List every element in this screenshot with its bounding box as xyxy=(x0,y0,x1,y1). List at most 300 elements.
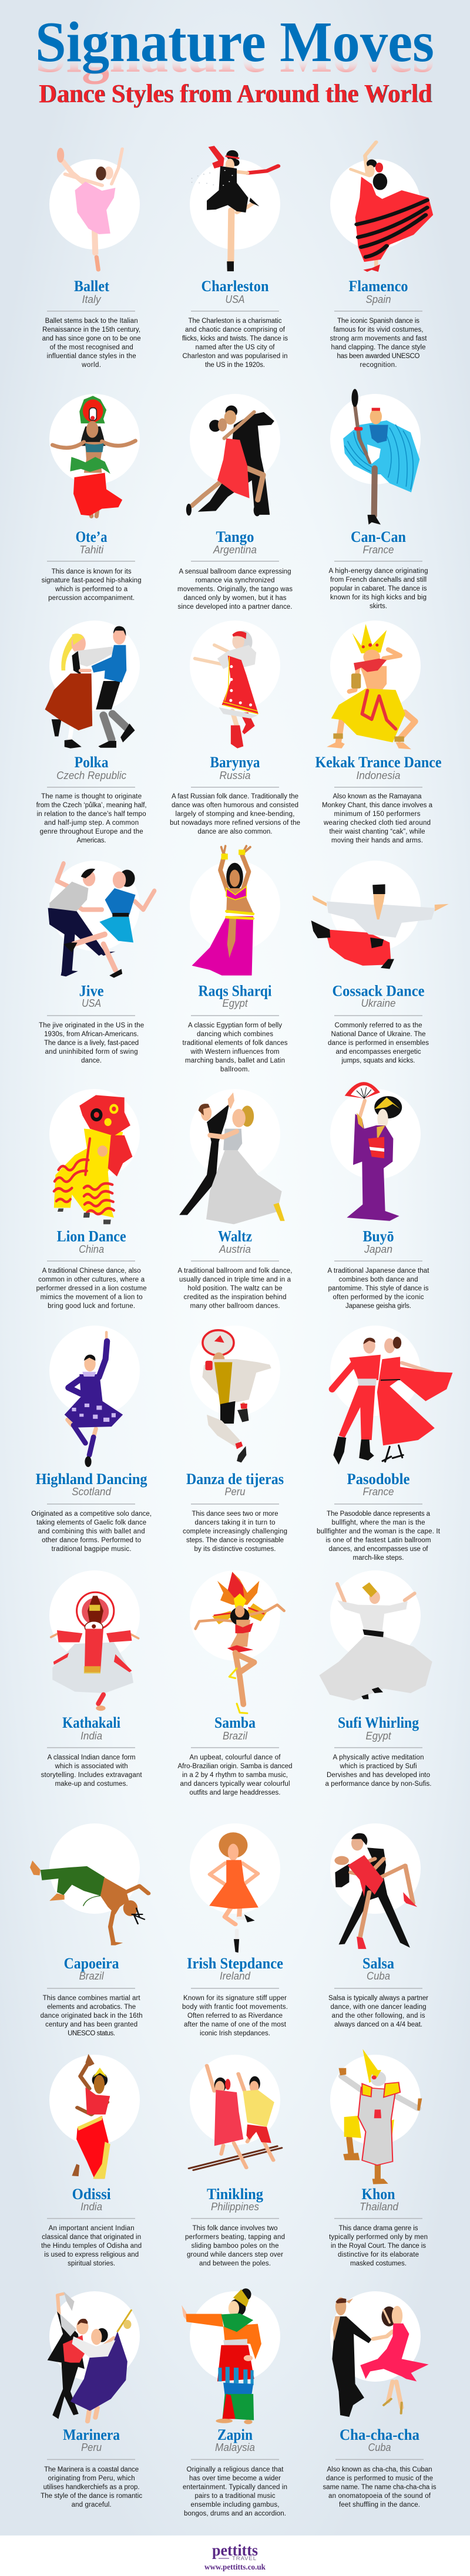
description: traditional bagpipe music. xyxy=(52,1546,132,1553)
heading: Kathakali xyxy=(62,1714,120,1731)
icon: irish stepdancer xyxy=(209,1832,258,1953)
country: Thailand xyxy=(360,2201,399,2213)
description: percussion accompaniment. xyxy=(48,595,135,602)
description: famous for its vivid costumes, xyxy=(334,326,423,333)
spotlight circle xyxy=(49,621,140,711)
description: utilises handkerchiefs as a prop. xyxy=(43,2484,140,2491)
description: Dervishes and has developed into xyxy=(327,1772,430,1779)
heading: Buyō xyxy=(363,1228,394,1245)
spotlight circle xyxy=(190,621,280,711)
description: Americas. xyxy=(77,837,106,844)
heading: Danza de tijeras xyxy=(186,1471,284,1488)
description: complete increasingly challenging xyxy=(183,1528,287,1535)
country: Scotland xyxy=(72,1486,112,1498)
country: Ukraine xyxy=(361,997,396,1009)
icon: capoeira dancer xyxy=(30,1860,149,1946)
description: The dance is a lively, fast-paced xyxy=(44,1040,139,1047)
description: bullfighter and the woman is the cape. It xyxy=(317,1528,441,1535)
description: dance. xyxy=(81,1057,102,1064)
description: The style of the dance is romantic xyxy=(41,2493,142,2500)
description: by its distinctive costumes. xyxy=(194,1546,276,1553)
panel: Cha-cha-cha xyxy=(323,2291,437,2508)
heading: Can-Can xyxy=(351,528,406,545)
description xyxy=(328,1022,429,1064)
country: USA xyxy=(82,997,101,1009)
panel: Irish Stepdance xyxy=(182,1823,288,2037)
subtitle: Dance Styles from Around the World xyxy=(39,79,432,108)
description: storytelling. Includes extravagant xyxy=(41,1772,142,1779)
description: which is practiced by Sufi xyxy=(340,1763,417,1770)
panel: Capoeira xyxy=(30,1823,149,2037)
description: which is associated with xyxy=(55,1763,128,1770)
description: always danced on a 4/4 beat. xyxy=(334,2021,422,2028)
country: India xyxy=(80,2201,102,2213)
icon: barynya dancer xyxy=(195,630,258,748)
spotlight circle xyxy=(330,1570,421,1661)
description: The name is thought to originate xyxy=(41,793,142,800)
spotlight circle xyxy=(190,2291,280,2382)
description: often performed by the iconic xyxy=(333,1294,424,1301)
country: Indonesia xyxy=(356,770,401,781)
panel: Barynya xyxy=(170,621,300,835)
icon: buyo dancer xyxy=(345,1082,402,1221)
panel: Zapin xyxy=(182,2288,287,2517)
description: hold position. The waltz can be xyxy=(188,1285,282,1292)
icon: jive couple xyxy=(48,864,155,978)
panel: Polka xyxy=(36,621,147,844)
description: a performance dance by non-Sufis. xyxy=(325,1781,431,1788)
description: This dance drama genre is xyxy=(338,2225,418,2232)
heading: Tango xyxy=(216,528,254,545)
description: taking elements of Gaelic folk dance xyxy=(36,1519,146,1526)
panel: Kekak Trance Dance xyxy=(315,621,442,844)
description: Charleston and was popularised in xyxy=(182,353,288,360)
description: originating from Peru, which xyxy=(48,2475,135,2482)
description: bring good luck and fortune. xyxy=(48,1303,135,1310)
website: www.pettitts.co.uk xyxy=(204,2563,266,2572)
heading: Polka xyxy=(75,754,109,771)
description xyxy=(41,2225,142,2267)
heading: Highland Dancing xyxy=(36,1471,147,1488)
description: after the name of one of the most xyxy=(184,2021,287,2028)
country: Peru xyxy=(224,1486,246,1498)
description: common in other cultures, where a xyxy=(38,1276,145,1283)
description xyxy=(329,2225,428,2267)
country: Spain xyxy=(365,294,391,305)
icon: salsa couple xyxy=(334,1833,417,1949)
country: Egypt xyxy=(222,997,248,1009)
icon: cha-cha-cha couple xyxy=(332,2297,429,2417)
description: has been awarded UNESCO xyxy=(337,353,420,360)
description: 1930s, from African-Americans. xyxy=(44,1031,139,1038)
description: signature fast-paced hip-shaking xyxy=(42,577,142,584)
description: which is performed to a xyxy=(55,586,128,593)
description: danced only by women, but it has xyxy=(183,595,287,602)
description: Often referred to as Riverdance xyxy=(187,2012,283,2019)
description: in the Royal Court. The dance is xyxy=(331,2243,426,2250)
description: This dance combines martial art xyxy=(43,1995,140,2002)
country: Brazil xyxy=(79,1970,105,1982)
spotlight circle xyxy=(190,861,280,951)
description: known for its high kicks and big xyxy=(330,594,427,601)
description: elements and acrobatics. The xyxy=(47,2004,136,2011)
description xyxy=(325,1754,431,1788)
description: is one of the fastest Latin ballroom xyxy=(325,1537,431,1544)
description: wearing checked cloth tied around xyxy=(323,820,431,827)
panel: Odissi xyxy=(41,2054,142,2267)
description xyxy=(41,2466,142,2508)
panel: Flamenco xyxy=(330,142,433,369)
country: Czech Republic xyxy=(56,770,126,781)
logo: pettitts: pettitts xyxy=(212,2541,258,2559)
description: The jive originated in the US in the xyxy=(39,1022,144,1029)
description: This dance sees two or more xyxy=(192,1510,278,1518)
country: China xyxy=(79,1243,104,1255)
description: and dancers typically wear colourful xyxy=(180,1781,290,1788)
description xyxy=(42,568,142,602)
description: jumps, squats and kicks. xyxy=(341,1057,415,1064)
panel: Danza de tijeras xyxy=(183,1326,287,1553)
description: and has since gone on to be one xyxy=(42,335,141,342)
description: largely of stomping and knee-bending, xyxy=(175,811,295,818)
description: march-like steps. xyxy=(352,1555,404,1562)
panel: Tango xyxy=(177,394,293,611)
icon: polka couple xyxy=(45,626,135,748)
country: Egypt xyxy=(365,1730,391,1742)
spotlight circle xyxy=(49,394,140,484)
description: dance is performed in ensembles xyxy=(328,1040,429,1047)
description: influential dance styles in the xyxy=(47,353,136,360)
description xyxy=(182,1022,288,1073)
description: from French dancehalls and still xyxy=(330,576,427,584)
country: Malaysia xyxy=(215,2442,255,2453)
description: The Pasodoble dance represents a xyxy=(327,1510,431,1518)
spotlight circle xyxy=(330,394,421,484)
description: usually danced in triple time and in a xyxy=(179,1276,291,1283)
icon: flamenco dancer xyxy=(351,142,433,272)
description xyxy=(170,793,300,835)
description: same name. The name cha-cha-cha is xyxy=(323,2484,437,2491)
description: Commonly referred to as the xyxy=(335,1022,422,1029)
description: in relation to the dance’s half tempo xyxy=(37,811,146,818)
description: and uninhibited form of swing xyxy=(45,1048,138,1056)
panel: Highland Dancing xyxy=(31,1326,152,1553)
description: bullfight, where the man is the xyxy=(331,1519,425,1526)
icon: tango couple xyxy=(186,406,274,516)
spotlight circle xyxy=(190,1823,280,1914)
country: Philippines xyxy=(211,2201,259,2213)
logo: travel: TRAVEL xyxy=(232,2555,256,2562)
description: An upbeat, colourful dance of xyxy=(189,1754,281,1761)
description: credited as the inspiration behind xyxy=(183,1294,287,1301)
heading: Tinikling xyxy=(207,2186,263,2203)
spotlight circle xyxy=(190,159,280,249)
description: century and has been granted xyxy=(45,2021,137,2028)
spotlight circle xyxy=(330,861,421,951)
description: sliding bamboo poles on the xyxy=(192,2243,278,2250)
spotlight circle xyxy=(190,394,280,484)
description: in a 2 by 4 rhythm to samba music, xyxy=(182,1772,288,1779)
description: of the most recognised and xyxy=(50,344,133,351)
description: A traditional ballroom and folk dance, xyxy=(177,1267,293,1274)
country: India xyxy=(80,1730,102,1742)
description: marching bands, ballet and Latin xyxy=(185,1057,285,1064)
description: A sensual ballroom dance expressing xyxy=(179,568,291,575)
panel: Lion Dance xyxy=(36,1089,147,1310)
description xyxy=(328,1267,429,1310)
panel: Kathakali xyxy=(41,1570,142,1788)
description: and between the poles. xyxy=(199,2260,271,2267)
spotlight circle xyxy=(49,1326,140,1416)
subtitle: Dance Styles from Around the World xyxy=(39,79,432,108)
heading: Capoeira xyxy=(64,1955,119,1972)
icon: samba dancer xyxy=(196,1572,284,1713)
spotlight circle xyxy=(49,2055,140,2145)
panel: Marinera xyxy=(41,2291,142,2508)
heading: Marinera xyxy=(63,2426,120,2443)
description: National Dance of Ukraine. The xyxy=(331,1031,425,1038)
country: France xyxy=(363,1486,394,1498)
country: Italy xyxy=(82,294,102,305)
description xyxy=(31,1510,152,1553)
spotlight circle xyxy=(330,621,421,711)
description: flicks, kicks and twists. The dance is xyxy=(182,335,288,342)
description xyxy=(317,1510,441,1562)
description: traditional elements of folk dances xyxy=(182,1040,288,1047)
icon: odissi dancer xyxy=(72,2054,110,2179)
heading: Charleston xyxy=(201,278,269,295)
description: and encompasses energetic xyxy=(336,1048,421,1056)
description: entertainment. Typically danced in xyxy=(183,2484,287,2491)
spotlight circle xyxy=(49,1570,140,1661)
description: iconic Irish stepdances. xyxy=(200,2030,270,2037)
heading: Ballet xyxy=(74,278,109,295)
country: Tahiti xyxy=(79,544,104,555)
spotlight circle xyxy=(49,2291,140,2382)
panel: Samba xyxy=(177,1570,293,1796)
description: dancing which combines xyxy=(197,1031,273,1038)
country: Peru xyxy=(81,2442,102,2453)
heading: Khon xyxy=(362,2186,395,2203)
description: an onomatopoeia of the sound of xyxy=(328,2493,431,2500)
icon: raqs sharqi dancer xyxy=(192,846,253,976)
description: movements. Originally, the tango was xyxy=(177,586,293,593)
description: A traditional Japanese dance that xyxy=(328,1267,429,1274)
description: and half-jump step. A common xyxy=(44,820,139,827)
description: Renaissance in the 15th century, xyxy=(42,326,140,333)
heading: Raqs Sharqi xyxy=(199,983,271,999)
heading: Cha-cha-cha xyxy=(340,2426,419,2443)
description: A physically active meditation xyxy=(333,1754,424,1761)
heading: Salsa xyxy=(362,1955,394,1972)
icon: ballet dancer xyxy=(57,148,122,270)
description: Japanese geisha girls. xyxy=(345,1303,411,1310)
icon: sufi whirling dancer xyxy=(319,1582,432,1701)
spotlight circle xyxy=(49,159,140,249)
description: Originally a religious dance that xyxy=(187,2466,284,2473)
title: Signature Moves xyxy=(35,21,434,84)
country: Austria xyxy=(219,1243,251,1255)
panel: Raqs Sharqi xyxy=(182,846,288,1073)
spotlight circle xyxy=(330,2055,421,2145)
icon: cossack dancer xyxy=(311,884,449,969)
heading: Odissi xyxy=(72,2186,111,2203)
icon: waltz couple xyxy=(179,1093,285,1224)
description: Also known as cha-cha, this Cuban xyxy=(327,2466,432,2473)
description xyxy=(182,318,288,369)
panel: Can-Can xyxy=(329,389,428,610)
description: recognition. xyxy=(360,362,397,369)
description xyxy=(183,1510,287,1553)
panel: Tinikling xyxy=(185,2055,285,2267)
description: ground while dancers step over xyxy=(187,2251,283,2258)
description: UNESCO status. xyxy=(68,2030,115,2037)
icon: can-can dancer xyxy=(343,389,419,525)
spotlight circle xyxy=(330,159,421,249)
country: Cuba xyxy=(367,1970,390,1982)
description: ballroom. xyxy=(220,1066,250,1073)
description: A classic Egyptian form of belly xyxy=(188,1022,282,1029)
description: A classical Indian dance form xyxy=(48,1754,136,1761)
description xyxy=(36,1267,147,1310)
description xyxy=(42,318,141,369)
description: dancers taking it in turn to xyxy=(195,1519,275,1526)
description: and the other following, and is xyxy=(331,2012,425,2019)
description: and chaotic dance comprising of xyxy=(185,326,286,333)
heading: Irish Stepdance xyxy=(187,1955,283,1972)
icon: charleston dancer xyxy=(192,146,278,271)
spotlight circle xyxy=(49,1823,140,1914)
spotlight circle xyxy=(190,2055,280,2145)
description: dance is performed to music of the xyxy=(326,2475,433,2482)
description: An important ancient Indian xyxy=(49,2225,135,2232)
spotlight circle xyxy=(330,2291,421,2382)
panel: Salsa xyxy=(328,1823,428,2028)
spotlight circle xyxy=(330,1823,421,1914)
heading: Samba xyxy=(214,1714,256,1731)
heading: Flamenco xyxy=(349,278,408,295)
heading: Barynya xyxy=(210,754,260,771)
description: A traditional Chinese dance, also xyxy=(42,1267,141,1274)
description: The iconic Spanish dance is xyxy=(337,318,419,325)
description: The Marinera is a coastal dance xyxy=(44,2466,139,2473)
description xyxy=(185,2225,285,2267)
icon: tinikling dancers xyxy=(189,2066,282,2170)
country: USA xyxy=(226,294,244,305)
icon: kekak dancer xyxy=(327,624,415,749)
description: This dance is known for its xyxy=(52,568,132,575)
description: dance originated back in the 16th xyxy=(41,2012,143,2019)
spotlight circle xyxy=(190,1570,280,1661)
spotlight circle xyxy=(49,1089,140,1179)
country: France xyxy=(363,544,394,555)
description: bongos, drums and an accordion. xyxy=(184,2510,286,2517)
description xyxy=(177,568,293,611)
description: combines both dance and xyxy=(338,1276,418,1283)
heading: Jive xyxy=(79,983,104,999)
description: pairs to a traditional music xyxy=(195,2493,276,2500)
spotlight circle xyxy=(49,861,140,951)
icon: marinera couple xyxy=(48,2291,131,2422)
description xyxy=(329,568,428,610)
description: with Western influences from xyxy=(190,1048,280,1056)
description: Salsa is typically always a partner xyxy=(328,1995,428,2002)
country: Cuba xyxy=(368,2442,391,2453)
description: Originated as a competitive solo dance, xyxy=(31,1510,152,1518)
panel: Charleston xyxy=(182,146,288,369)
country: Ireland xyxy=(220,1970,251,1982)
panel: Jive xyxy=(39,861,155,1064)
description: dances, and encompasses use of xyxy=(329,1546,428,1553)
description: feet shuffling in the dance. xyxy=(339,2501,420,2508)
description: from the Czech ‘půlka’, meaning half, xyxy=(36,802,147,809)
description: their waist chanting “cak”, while xyxy=(329,828,425,835)
description: and graceful. xyxy=(72,2501,112,2508)
description: world. xyxy=(81,362,101,369)
panel: Cossack Dance xyxy=(311,861,449,1064)
description: Afro-Brazilian origin. Samba is danced xyxy=(177,1763,293,1770)
icon: ote'a dancer xyxy=(52,396,136,516)
description: classical dance that originated in xyxy=(42,2234,141,2241)
description: minimum of 150 performers xyxy=(334,811,421,818)
panel: Waltz xyxy=(177,1089,293,1310)
description: dance, with one dancer leading xyxy=(330,2004,427,2011)
description: genre throughout Europe and the xyxy=(40,828,143,835)
icon: danza de tijeras dancer xyxy=(202,1330,271,1462)
icon: highland dancer xyxy=(65,1332,123,1467)
panel: Sufi Whirling xyxy=(319,1570,432,1788)
description: performer dressed in a lion costume xyxy=(36,1285,147,1292)
description: the US in the 1920s. xyxy=(205,362,265,369)
description: hand clapping. The dance style xyxy=(331,344,425,351)
description xyxy=(328,1995,428,2028)
description xyxy=(41,1754,142,1788)
description: dance are also common. xyxy=(197,828,273,835)
heading: Kekak Trance Dance xyxy=(315,754,442,771)
description: ensemble including gambus, xyxy=(190,2501,280,2508)
description xyxy=(323,2466,437,2508)
description: other dance forms. Performed to xyxy=(42,1537,141,1544)
description: named after the US city of xyxy=(195,344,275,351)
panel: Ballet xyxy=(42,148,141,369)
description: since developed into a partner dance. xyxy=(177,603,293,611)
description: romance via synchronized xyxy=(195,577,275,584)
description: This folk dance involves two xyxy=(193,2225,277,2232)
panel: Buyo xyxy=(328,1082,429,1310)
description: dance was often humorous and consisted xyxy=(172,802,298,809)
description: Known for its signature stiff upper xyxy=(183,1995,287,2002)
description xyxy=(330,318,427,369)
description: A high-energy dance originating xyxy=(329,568,428,575)
heading: Sufi Whirling xyxy=(338,1714,419,1731)
icon: pasodoble couple xyxy=(332,1337,452,1465)
description xyxy=(41,1995,143,2037)
footer xyxy=(0,2535,470,2576)
description xyxy=(39,1022,144,1064)
description: many other ballroom dances. xyxy=(190,1303,280,1310)
description: spiritual stories. xyxy=(68,2260,115,2267)
description xyxy=(322,793,433,844)
panel: Pasodoble xyxy=(317,1326,452,1562)
description xyxy=(177,1267,293,1310)
heading: Zapin xyxy=(217,2426,253,2443)
description: is used to express religious and xyxy=(44,2251,139,2258)
heading: Ote’a xyxy=(76,528,108,545)
description: mimics the movement of a lion to xyxy=(41,1294,143,1301)
title: Signature Moves xyxy=(35,11,434,73)
spotlight circle xyxy=(190,1089,280,1179)
description: Ballet stems back to the Italian xyxy=(45,318,138,325)
